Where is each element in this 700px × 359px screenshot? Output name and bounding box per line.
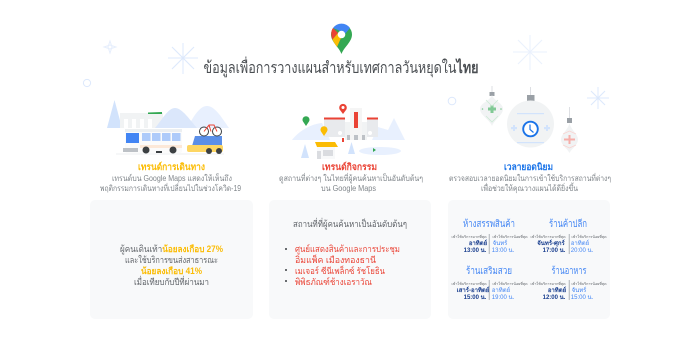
restaurants: เข้าใช้บริการน้อยที่สุด xyxy=(572,281,607,287)
background decorations: snowflakes xyxy=(83,35,609,109)
beauty shops: เสาร์-อาทิตย์ xyxy=(457,286,490,294)
beauty shops: เข้าใช้บริการน้อยที่สุด xyxy=(492,281,528,287)
panel heading: สถานที่ที่ผู้คนค้นหาเป็นอันดับต้นๆ xyxy=(293,217,407,230)
stat text: ผู้คนเดินเท้าน้อยลงเกือบ 27% xyxy=(120,243,223,255)
beauty shops: ร้านเสริมสวย xyxy=(466,265,512,277)
stat text: น้อยลงเกือบ 41% xyxy=(141,265,202,276)
restaurants: อาทิตย์ xyxy=(548,286,567,294)
restaurants: เข้าใช้บริการมากที่สุด xyxy=(530,281,566,287)
beauty shops: 15:00 น. xyxy=(464,294,487,301)
stat text: เมื่อเทียบกับปีที่ผ่านมา xyxy=(134,275,209,287)
retail stores: จันทร์-ศุกร์ xyxy=(537,239,566,247)
description: activity trends xyxy=(279,172,423,193)
restaurants xyxy=(530,265,607,301)
retail stores: อาทิตย์ xyxy=(571,239,589,247)
beauty shops: 19:00 น. xyxy=(492,295,515,301)
retail stores: 17:00 น. xyxy=(543,247,566,254)
description: travel trends: พฤติกรรมการเดินทางที่เปลี่ยนไปในช่วงโควิด-19 xyxy=(100,182,241,193)
heading: peak times: เวลายอดนิยม xyxy=(504,162,553,173)
department stores xyxy=(452,218,528,254)
list of places xyxy=(285,243,400,287)
heading: activity trends: เทรนด์กิจกรรม xyxy=(322,161,377,173)
department stores: 13:00 น. xyxy=(464,247,487,254)
description: activity trends: ดูสถานที่ต่างๆ ในไทยที่ผู้คนค้นหาเป็นอันดับต้นๆ xyxy=(279,172,423,184)
beauty shops xyxy=(452,265,528,301)
department stores: ห้างสรรพสินค้า xyxy=(463,218,515,230)
illustration: places, buildings and pins xyxy=(292,104,405,159)
retail stores: 20:00 น. xyxy=(571,248,594,254)
description: peak times: ตรวจสอบเวลายอดนิยมในการเข้าใช้บริการสถานที่ต่างๆ xyxy=(449,172,611,183)
heading: travel trends: เทรนด์การเดินทาง xyxy=(138,161,205,173)
description: peak times: เพื่อช่วยให้คุณวางแผนได้ดียิ่งขึ้น xyxy=(481,182,578,193)
list of places: ศูนย์แสดงสินค้าและการประชุม xyxy=(295,243,400,255)
description: travel trends xyxy=(100,173,241,193)
restaurants: ร้านอาหาร xyxy=(552,265,587,277)
stat text: และใช้บริการขนส่งสาธารณะ xyxy=(125,255,218,265)
list of places: เมเจอร์ ซีนีเพล็กซ์ รัชโยธิน xyxy=(295,264,385,276)
beauty shops: อาทิตย์ xyxy=(492,286,510,294)
department stores: อาทิตย์ xyxy=(469,239,488,247)
panel: peak times by store type xyxy=(448,200,610,319)
description: travel trends: เทรนด์บน Google Maps แสดงให้เห็นถึง xyxy=(112,173,232,183)
department stores: เข้าใช้บริการน้อยที่สุด xyxy=(492,234,528,240)
illustration: clock ornaments xyxy=(480,86,578,153)
list of places: พิพิธภัณฑ์ช้างเอราวัณ xyxy=(295,276,372,287)
department stores: 13:00 น. xyxy=(492,248,515,254)
retail stores: เข้าใช้บริการมากที่สุด xyxy=(530,234,566,240)
list of places: อิมแพ็ค เมืองทองธานี xyxy=(295,253,376,265)
description: peak times xyxy=(449,172,611,193)
icon: Google Maps pin xyxy=(331,24,352,54)
retail stores xyxy=(530,218,607,254)
panel: top searched places xyxy=(269,200,431,319)
restaurants: จันทร์ xyxy=(572,286,587,294)
stat text xyxy=(120,243,223,287)
beauty shops: เข้าใช้บริการมากที่สุด xyxy=(452,281,487,287)
retail stores: ร้านค้าปลีก xyxy=(549,218,587,230)
department stores: จันทร์ xyxy=(493,239,508,247)
title: ข้อมูลเพื่อการวางแผนสำหรับเทศกาลวันหยุดในไทย xyxy=(203,56,478,78)
illustration: travel, bus and car xyxy=(107,100,229,154)
panel: travel stats xyxy=(90,200,253,319)
restaurants: 15:00 น. xyxy=(571,295,594,301)
retail stores: เข้าใช้บริการน้อยที่สุด xyxy=(572,234,607,240)
department stores: เข้าใช้บริการมากที่สุด xyxy=(452,234,487,240)
description: activity trends: บน Google Maps xyxy=(321,184,376,193)
restaurants: 12:00 น. xyxy=(543,294,566,301)
